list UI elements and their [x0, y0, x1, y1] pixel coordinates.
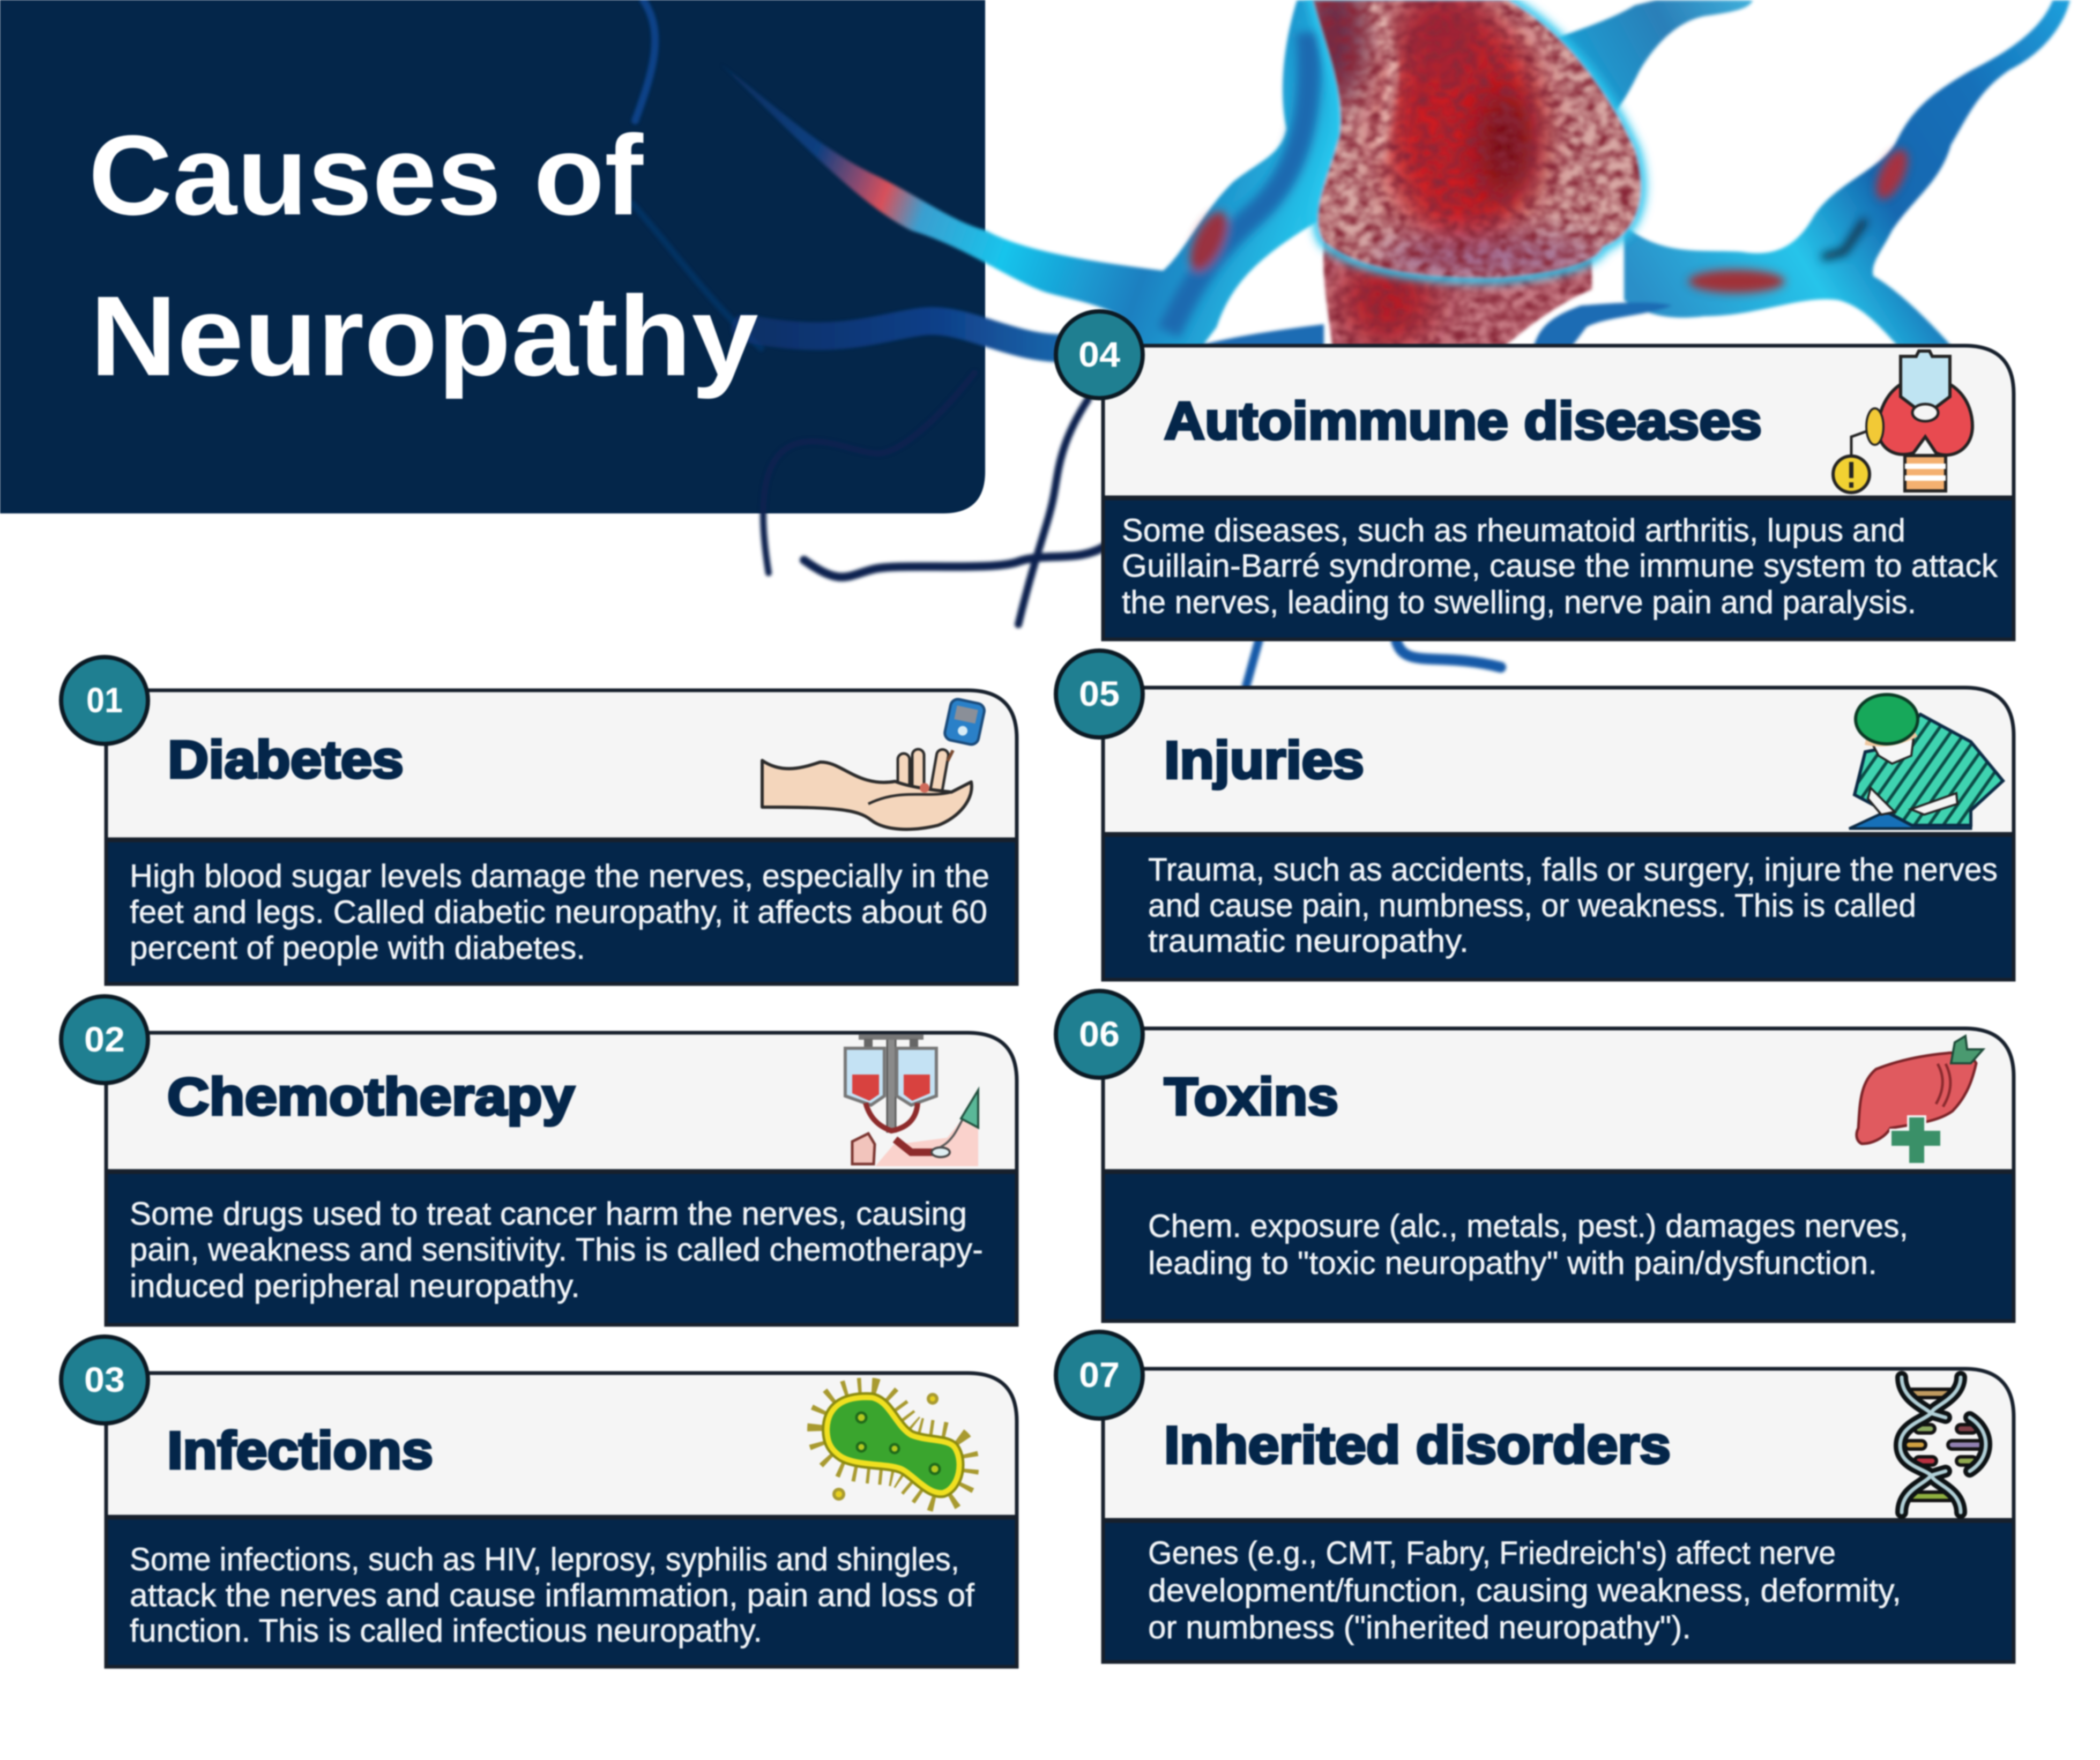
neuron body: cyan glow [1313, 0, 1641, 278]
description: Genes (e.g., CMT, Fabry, Friedreich's) affect nerve [1148, 1535, 1836, 1571]
dendrite: left branch [721, 0, 1339, 348]
description: Some infections, such as HIV, leprosy, syphilis and shingles, [130, 1541, 959, 1577]
number badge [1056, 311, 1143, 398]
card header [105, 690, 1017, 839]
description: leading to "toxic neuropathy" with pain/dysfunction. [1148, 1245, 1877, 1281]
card header [106, 1033, 1017, 1171]
card header [106, 1373, 1017, 1517]
icon: DNA helix [1900, 1377, 1986, 1512]
title: Causes of [88, 111, 644, 238]
neuron body: lower lobe [1321, 241, 1595, 345]
panel: 03 Infections [61, 1337, 1017, 1667]
number badge [1056, 1332, 1143, 1419]
dendrite: top right branch [1544, 0, 1753, 123]
card header [1103, 1028, 2014, 1171]
description [1148, 1535, 1901, 1645]
dendrite: thin strands lower left [763, 373, 1104, 624]
description: induced peripheral neuropathy. [130, 1268, 580, 1304]
number: 02 [84, 1019, 125, 1059]
number badge [1056, 991, 1143, 1078]
card body [106, 1172, 1017, 1325]
description: feet and legs. Called diabetic neuropathy, it affects about 60 [130, 894, 987, 930]
description: pain, weakness and sensitivity. This is called chemotherapy- [130, 1232, 983, 1267]
card body [1103, 1172, 2014, 1321]
number badge [61, 996, 148, 1083]
heading: Inherited disorders [1164, 1415, 1671, 1474]
panel: 06 Toxins [1056, 991, 2014, 1321]
card header [1103, 1369, 2014, 1520]
dendrite: horizontal tail [745, 321, 1064, 348]
description: and cause pain, numbness, or weakness. This is called [1148, 888, 1916, 923]
panel: 07 Inherited disorders [1056, 1332, 2014, 1662]
description: traumatic neuropathy. [1148, 923, 1469, 959]
description: Chem. exposure (alc., metals, pest.) damages nerves, [1148, 1208, 1908, 1244]
number badge [61, 657, 148, 744]
heading: Toxins [1164, 1067, 1338, 1126]
description [1148, 1208, 1908, 1281]
panel: 05 Injuries [1056, 651, 2014, 980]
description: function. This is called infectious neuropathy. [130, 1613, 762, 1649]
dendrite: bottom stems [1190, 302, 1672, 348]
panel: 02 Chemotherapy [61, 996, 1017, 1325]
number: 01 [86, 680, 123, 720]
description: development/function, causing weakness, deformity, [1148, 1572, 1901, 1608]
number badge [1056, 651, 1143, 737]
description: Some drugs used to treat cancer harm the nerves, causing [130, 1196, 967, 1232]
number: 06 [1079, 1014, 1120, 1054]
dendrite: stubs below card 04 [1246, 638, 1501, 686]
card body [106, 840, 1017, 984]
description [1148, 852, 1998, 959]
number: 04 [1078, 334, 1120, 374]
description [130, 1196, 983, 1304]
description: attack the nerves and cause inflammation, pain and loss of [130, 1577, 974, 1613]
number: 03 [84, 1360, 125, 1399]
card body [1103, 1521, 2014, 1662]
panel: 01 Diabetes [61, 657, 1017, 984]
description [130, 858, 989, 966]
card header [1103, 346, 2014, 497]
card body [106, 1518, 1017, 1667]
dendrite: right red spots [1688, 145, 1914, 293]
dendrite: right branch [1624, 0, 2070, 346]
number badge [61, 1337, 148, 1423]
card header [1103, 688, 2014, 834]
description: or numbness ("inherited neuropathy"). [1148, 1609, 1691, 1645]
icon: bacterium [827, 1394, 959, 1499]
description: Trauma, such as accidents, falls or surgery, injure the nerves [1148, 852, 1998, 888]
icon: thyroid [1833, 351, 1972, 493]
description: Some diseases, such as rheumatoid arthritis, lupus and [1122, 512, 1905, 548]
description: Guillain-Barré syndrome, cause the immune system to attack [1122, 548, 1998, 584]
panel: 04 Autoimmune diseases [1056, 311, 2014, 639]
icon: liver [1857, 1036, 1983, 1164]
description [130, 1541, 974, 1649]
number: 05 [1079, 674, 1120, 713]
card body [1103, 498, 2014, 639]
dendrite: thin upper strand on title panel [635, 0, 655, 121]
heading: Injuries [1164, 730, 1364, 789]
description: High blood sugar levels damage the nerves, especially in the [130, 858, 989, 894]
title panel [0, 0, 985, 513]
description [1122, 512, 1998, 620]
heading: Diabetes [168, 730, 404, 789]
icon: surgeon [1849, 695, 2003, 829]
heading: Chemotherapy [167, 1067, 575, 1126]
icon: hand with glucose meter [762, 698, 986, 829]
description: percent of people with diabetes. [130, 930, 585, 966]
title: Neuropathy [90, 272, 758, 399]
heading: Autoimmune diseases [1164, 391, 1762, 450]
neuron illustration [632, 0, 2070, 686]
dendrite: left dark centre and red spot [1168, 32, 1309, 332]
card body [1103, 835, 2014, 980]
neuron body: main cell [1311, 0, 1644, 280]
number: 07 [1079, 1355, 1120, 1394]
description: the nerves, leading to swelling, nerve pain and paralysis. [1122, 584, 1916, 620]
heading: Infections [167, 1421, 433, 1480]
title [88, 111, 758, 399]
icon: IV drip bags [845, 1034, 978, 1166]
dendrite: faint strand on panel [632, 204, 761, 348]
